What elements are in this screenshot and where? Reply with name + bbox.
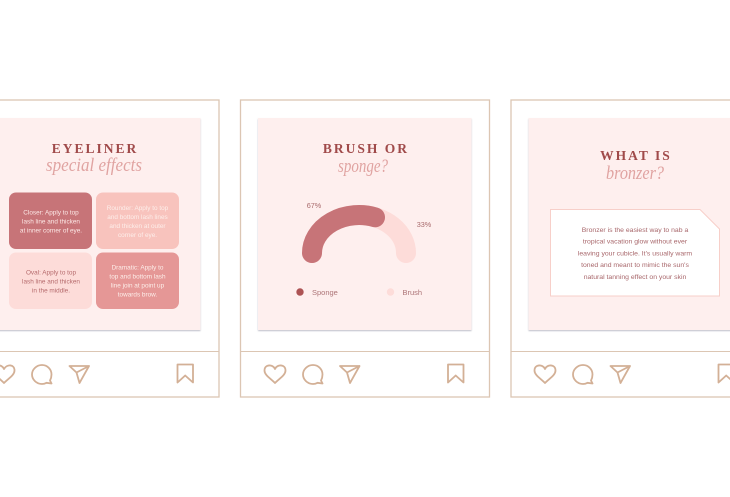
- heading: what is: WHAT IS: [600, 148, 672, 163]
- panel: what is bronzer: [528, 118, 730, 330]
- icon: bookmark: [178, 364, 193, 382]
- label: 67%: 67%: [307, 201, 322, 210]
- card: closer: lash line and thicken: [22, 218, 80, 226]
- icon: comment: [573, 365, 592, 384]
- card: rounder: corner of eye.: [118, 232, 157, 239]
- card: rounder: and bottom lash lines: [107, 214, 168, 221]
- card: dramatic: top and bottom lash: [109, 274, 166, 280]
- icon: heart: [264, 365, 286, 383]
- card: rounder: [96, 192, 179, 249]
- card: rounder: Rounder: Apply to top: [107, 205, 169, 212]
- card: closer: [9, 192, 92, 249]
- icon: comment: [32, 365, 52, 384]
- heading: eyeliner: EYELINER: [52, 141, 138, 156]
- card: dramatic: [96, 252, 179, 309]
- icon: bookmark: [718, 364, 730, 382]
- legend: sponge: Sponge: [312, 288, 338, 297]
- card: oval: Oval: Apply to top: [26, 270, 76, 276]
- panel: brush or sponge: [258, 118, 472, 330]
- text card: bronzer description: tropical vacation glow without ever: [583, 238, 688, 246]
- card: closer: at inner corner of eye.: [20, 228, 82, 234]
- icon: comment: [303, 365, 322, 384]
- heading: brush or: BRUSH OR: [323, 141, 409, 156]
- icon: heart: [0, 365, 14, 383]
- legend: sponge: [296, 288, 338, 297]
- panel: eyeliner: [0, 118, 200, 330]
- icon: send: [340, 366, 360, 383]
- donut chart: semicircle: [307, 201, 432, 253]
- icon: heart: [534, 365, 556, 383]
- card: closer: Closer: Apply to top: [23, 210, 79, 216]
- card: dramatic: Dramatic: Apply to: [112, 264, 164, 272]
- script heading: bronzer: bronzer?: [606, 163, 664, 184]
- text card: bronzer description: toned and meant to mimic the sun's: [581, 262, 689, 269]
- card: dramatic: towards brow.: [118, 292, 157, 298]
- text card: bronzer description: leaving your cubicle. It's usually warm: [578, 250, 692, 258]
- script heading: special effects: special effects: [46, 155, 142, 176]
- script heading: sponge: sponge?: [338, 156, 388, 177]
- card: oval: in the middle.: [32, 288, 70, 294]
- text card: bronzer description: [550, 210, 720, 296]
- post frame: eyeliner: [0, 100, 219, 397]
- card: oval: [9, 252, 92, 309]
- icon: send: [70, 366, 89, 383]
- text card: bronzer description: Bronzer is the easiest way to nab a: [582, 227, 688, 234]
- legend: brush: Brush: [402, 288, 422, 297]
- icon: send: [610, 366, 630, 383]
- card: oval: lash line and thicken: [22, 278, 80, 286]
- post frame: what is bronzer: [511, 100, 730, 397]
- legend: brush: [387, 288, 422, 297]
- label: 33%: 33%: [417, 220, 432, 229]
- post frame: brush or sponge: [240, 100, 490, 397]
- card: rounder: and thicken at outer: [109, 223, 166, 230]
- icon: bookmark: [448, 364, 464, 382]
- card: dramatic: line join at point up: [111, 282, 165, 290]
- text card: bronzer description: natural tanning effect on your skin: [584, 274, 686, 281]
